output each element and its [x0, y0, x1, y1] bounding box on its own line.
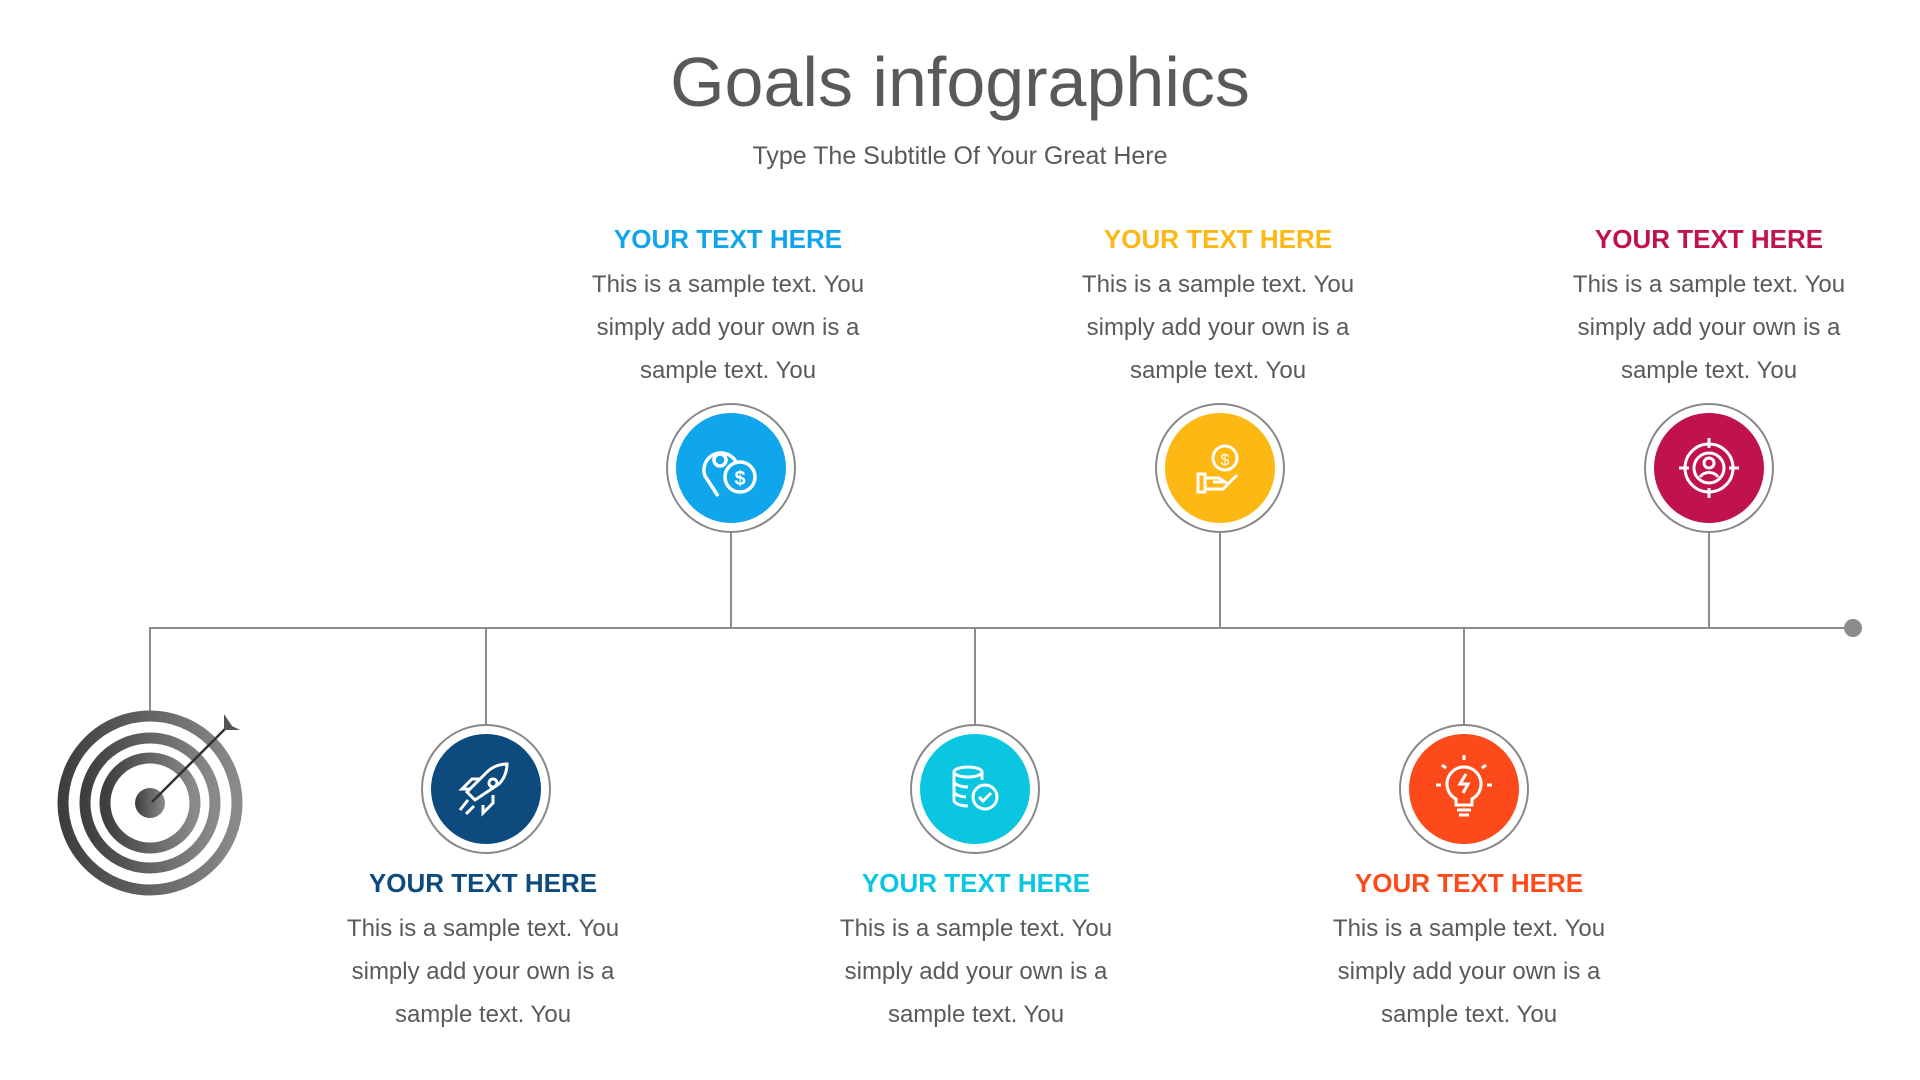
icon circle: location money [667, 404, 795, 532]
end dot [1844, 619, 1862, 637]
icon circle: location money: $ [734, 468, 746, 490]
text block 2 (navy): This is a sample text. You simply add your own is a sample text. You [347, 915, 619, 1028]
text block 1 (blue): This is a sample text. You simply add your own is a sample text. You [592, 271, 864, 384]
text block 1 (blue): YOUR TEXT HERE [614, 224, 842, 254]
icon circle: database check [911, 725, 1039, 853]
text block 4 (cyan): This is a sample text. You simply add your own is a sample text. You [840, 915, 1112, 1028]
title: Goals infographics [670, 43, 1250, 121]
text block 6 (orange): This is a sample text. You simply add your own is a sample text. You [1333, 915, 1605, 1028]
icon circle: hand money: $ [1221, 452, 1230, 469]
text block 6 (orange): YOUR TEXT HERE [1355, 868, 1583, 898]
subtitle: Type The Subtitle Of Your Great Here [752, 142, 1168, 170]
text block 4 (cyan): YOUR TEXT HERE [862, 868, 1090, 898]
icon circle: rocket [422, 725, 550, 853]
icon circle: lightbulb [1400, 725, 1528, 853]
text block 3 (yellow): YOUR TEXT HERE [1104, 224, 1332, 254]
text block 5 (crimson): YOUR TEXT HERE [1595, 224, 1823, 254]
text block 3 (yellow): This is a sample text. You simply add your own is a sample text. You [1082, 271, 1354, 384]
text block 2 (navy): YOUR TEXT HERE [369, 868, 597, 898]
text block 5 (crimson): This is a sample text. You simply add your own is a sample text. You [1573, 271, 1845, 384]
icon circle: hand money [1156, 404, 1284, 532]
icon circle: target person [1645, 404, 1773, 532]
icon: target with arrow [63, 714, 240, 890]
